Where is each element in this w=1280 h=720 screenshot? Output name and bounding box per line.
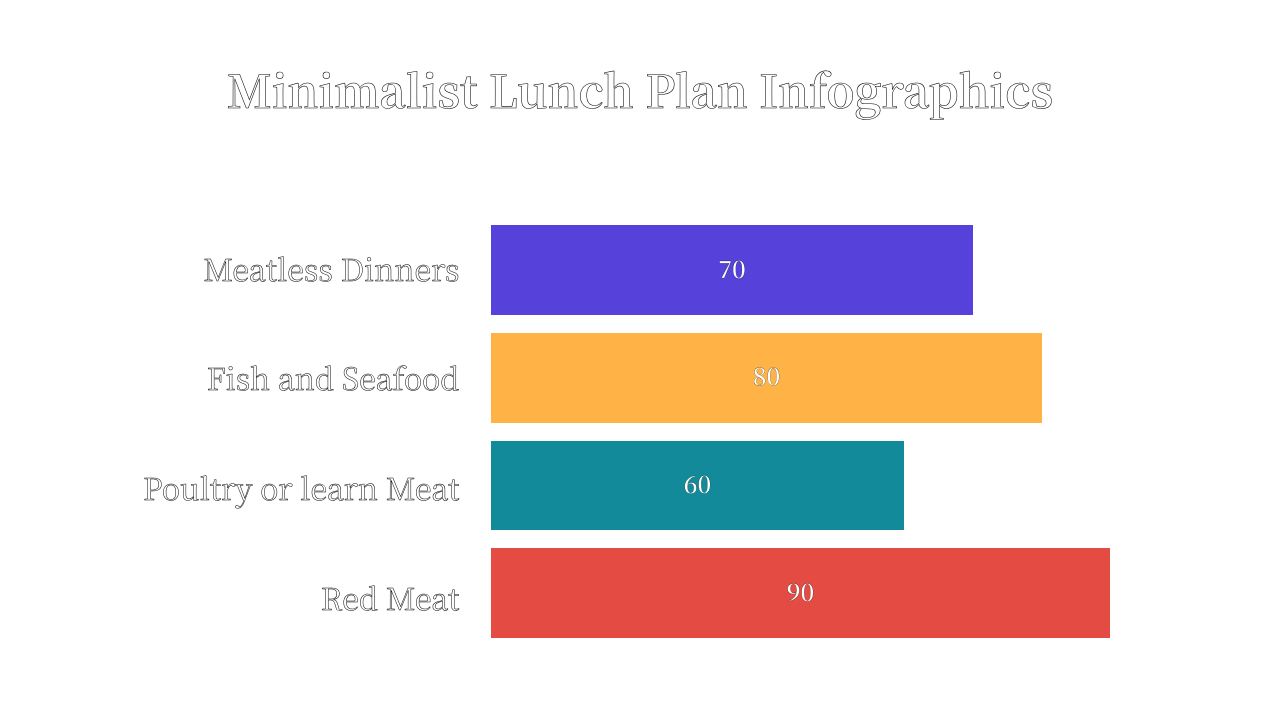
- bar: Meatless Dinners 70: 70: [718, 250, 746, 285]
- bar: Poultry or learn Meat 60: [491, 441, 904, 530]
- label: Fish and Seafood: Fish and Seafood: [207, 355, 460, 399]
- title: Minimalist Lunch Plan Infographics: [227, 56, 1053, 121]
- bar: Fish and Seafood 80: 80: [753, 357, 780, 392]
- bar: Meatless Dinners 70: [491, 225, 973, 315]
- bar: Fish and Seafood 80: [491, 333, 1042, 423]
- label: Red Meat: Red Meat: [321, 575, 460, 619]
- label: Poultry or learn Meat: Poultry or learn Meat: [143, 465, 460, 509]
- bar: Red Meat 90: 90: [787, 573, 814, 608]
- label: Meatless Dinners: Meatless Dinners: [203, 246, 460, 290]
- bar: Red Meat 90: [491, 548, 1110, 638]
- bar: Poultry or learn Meat 60: 60: [684, 465, 711, 500]
